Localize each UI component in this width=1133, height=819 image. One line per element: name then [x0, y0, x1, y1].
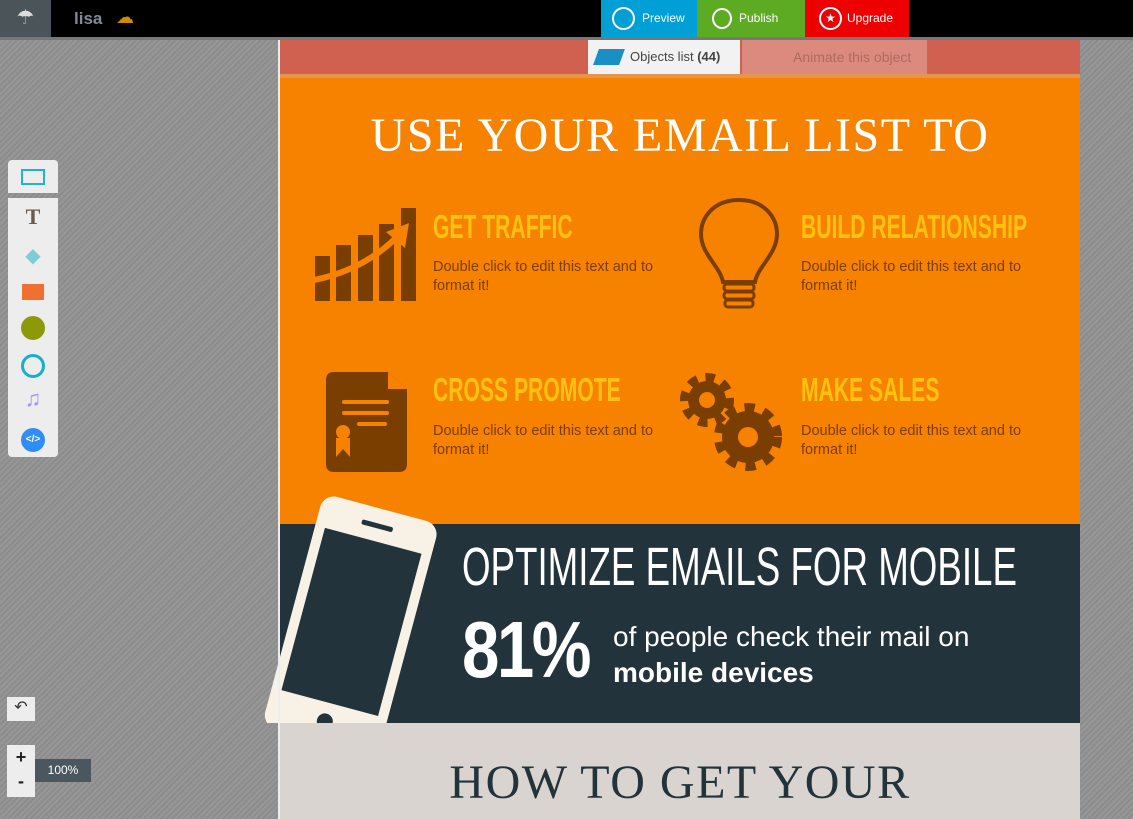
text: traffic: Double click to edit this text and to format it!: [433, 259, 653, 294]
dark mobile panel: [280, 524, 1080, 724]
red header strip: [280, 40, 1080, 74]
text: relationship: Double click to edit this text and to format it!: [801, 259, 1021, 294]
logo: ☂: [17, 7, 34, 29]
top bar: [0, 0, 1133, 37]
heading: get traffic: GET TRAFFIC: [433, 208, 573, 245]
toolbar: [8, 160, 58, 457]
heading: cross promote: CROSS PROMOTE: [433, 371, 621, 408]
zoom controls: -: [18, 771, 24, 791]
heading: how to get: HOW TO GET YOUR: [449, 756, 911, 809]
text: stat: mobile devices: [613, 657, 814, 688]
zoom controls: +: [16, 747, 26, 767]
heading: build relationship: BUILD RELATIONSHIP: [801, 208, 1027, 245]
user name: lisa: [74, 9, 102, 28]
objects list button: Objects list (44): [630, 49, 720, 64]
title: USE YOUR EMAIL LIST TO: [371, 109, 989, 162]
icon: bulb: [699, 198, 779, 308]
logo: [0, 0, 51, 37]
text: make sales: Double click to edit this text and to format it!: [801, 423, 1021, 458]
text: stat: of people check their mail on: [613, 621, 969, 652]
orange panel: [280, 78, 1080, 524]
upgrade button: Upgrade: [847, 11, 893, 25]
publish button: Publish: [739, 11, 778, 25]
preview button: [601, 0, 697, 37]
icon: phone: [264, 496, 437, 723]
undo button: [7, 697, 35, 721]
stat: 81%: 81%: [462, 605, 589, 694]
zoom label: 100%: [48, 763, 78, 777]
toolbar: ◆: [25, 245, 41, 267]
toolbar: T: [26, 204, 40, 229]
upgrade button: [805, 0, 909, 37]
icon: gears: [680, 373, 782, 471]
animate button: Animate this object: [793, 49, 911, 65]
text: stat: [613, 621, 969, 688]
animate button: [742, 40, 927, 74]
heading: optimize: OPTIMIZE EMAILS FOR MOBILE: [462, 537, 1017, 597]
zoom controls: [7, 745, 35, 797]
icon: cloud: ☁: [116, 7, 134, 27]
heading: make sales: MAKE SALES: [801, 371, 939, 408]
icon: certificate: [326, 372, 407, 472]
text: cross promote: Double click to edit this text and to format it!: [433, 423, 653, 458]
objects list button: [588, 40, 740, 74]
beige panel: [280, 723, 1080, 819]
preview button: Preview: [642, 11, 685, 25]
toolbar: ♫: [25, 386, 41, 411]
toolbar: </>: [26, 434, 40, 445]
publish button: [697, 0, 805, 37]
zoom label: [35, 759, 91, 782]
upgrade button: ★: [825, 11, 836, 25]
undo button: ↶: [14, 699, 28, 716]
icon: chart: [315, 208, 416, 301]
